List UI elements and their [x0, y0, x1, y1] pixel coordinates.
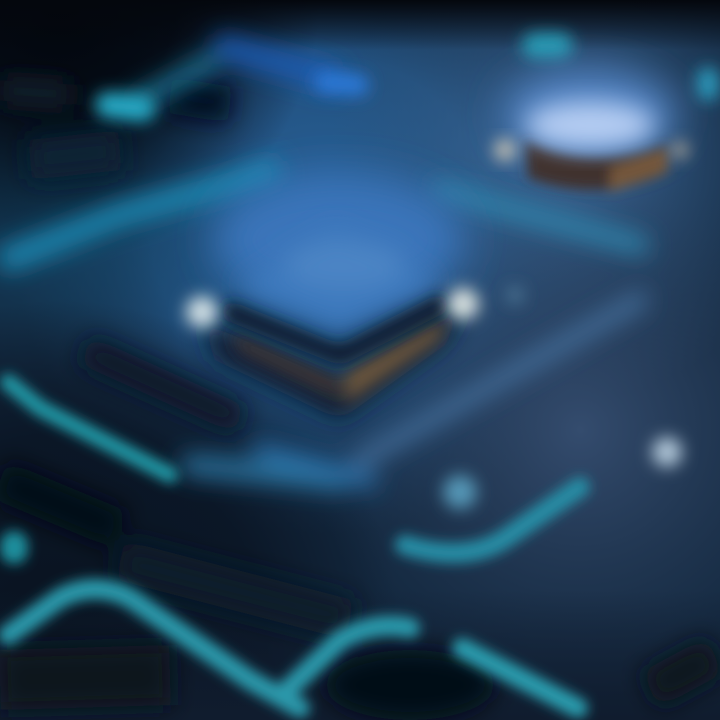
chip glow — [215, 175, 465, 305]
chip shadow — [200, 300, 470, 420]
upper right chip — [494, 70, 688, 192]
chip side — [230, 318, 445, 405]
chip glow — [505, 70, 675, 160]
diagonal light traces — [190, 190, 640, 480]
chip dark chevron — [232, 305, 438, 355]
chip top — [238, 225, 440, 330]
central chip — [186, 175, 479, 420]
teal circuit traces: lower — [8, 382, 580, 708]
chip lights — [494, 139, 688, 161]
chip top — [526, 102, 654, 148]
teal circuit traces: upper — [0, 45, 708, 262]
chip lights — [186, 288, 479, 328]
glowing nodes — [443, 286, 682, 509]
chip side — [525, 140, 668, 192]
